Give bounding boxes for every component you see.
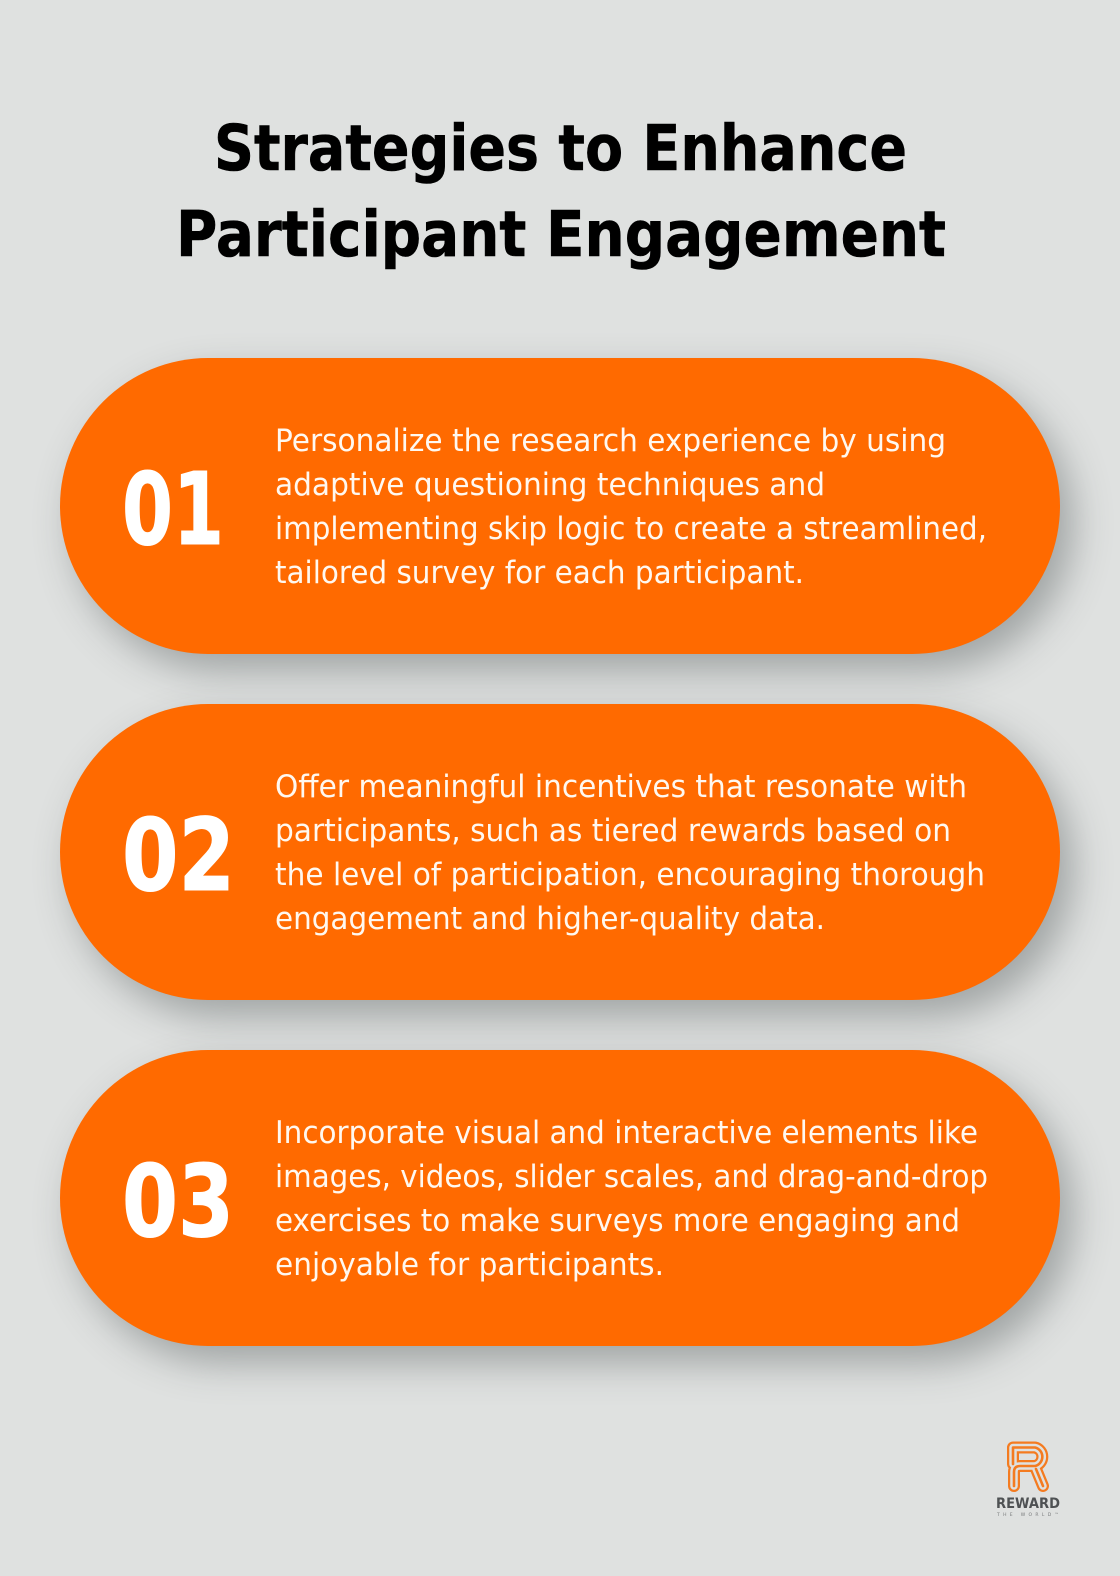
text block: strategy 01 description: Personalize the research experience by using [275, 423, 946, 459]
panel: strategy 01 [60, 358, 1060, 654]
text block: strategy 03 description: images, videos, slider scales, and drag-and-drop [275, 1159, 988, 1195]
text block: strategy 03 description: exercises to make surveys more engaging and [275, 1203, 960, 1239]
text block: strategy 02 description: participants, such as tiered rewards based on [275, 813, 951, 849]
panel: strategy 03 [60, 1050, 1060, 1346]
text block: strategy 01 description: adaptive questioning techniques and [275, 467, 825, 503]
panel: strategy 02 [60, 704, 1060, 1000]
logo wordmark: REWARD [996, 1496, 1060, 1512]
number 01: 01 [122, 451, 224, 568]
text block: strategy 02 description: engagement and higher-quality data. [275, 901, 825, 937]
text block: strategy 02 description: Offer meaningful incentives that resonate with [275, 769, 967, 805]
title: Strategies to Enhance [214, 112, 907, 185]
logo: Reward the World [996, 1442, 1060, 1518]
text block: strategy 03 description: enjoyable for participants. [275, 1247, 664, 1283]
text block: strategy 01 description: tailored survey for each participant. [275, 555, 804, 591]
text block: strategy 03 description: Incorporate visual and interactive elements like [275, 1115, 978, 1151]
text block: strategy 02 description [275, 769, 985, 937]
text block: strategy 01 description: implementing skip logic to create a streamlined, [275, 511, 987, 547]
text block: strategy 03 description [275, 1115, 988, 1283]
number 03: 03 [122, 1143, 234, 1260]
number 02: 02 [122, 797, 235, 914]
text block: strategy 02 description: the level of participation, encouraging thorough [275, 857, 985, 893]
title: Participant Engagement [176, 198, 946, 271]
logo wordmark: THE WORLD™ [996, 1512, 1059, 1518]
icon: R mark [1013, 1448, 1043, 1486]
title [176, 112, 946, 271]
logo wordmark [996, 1496, 1060, 1518]
text block: strategy 01 description [275, 423, 987, 591]
